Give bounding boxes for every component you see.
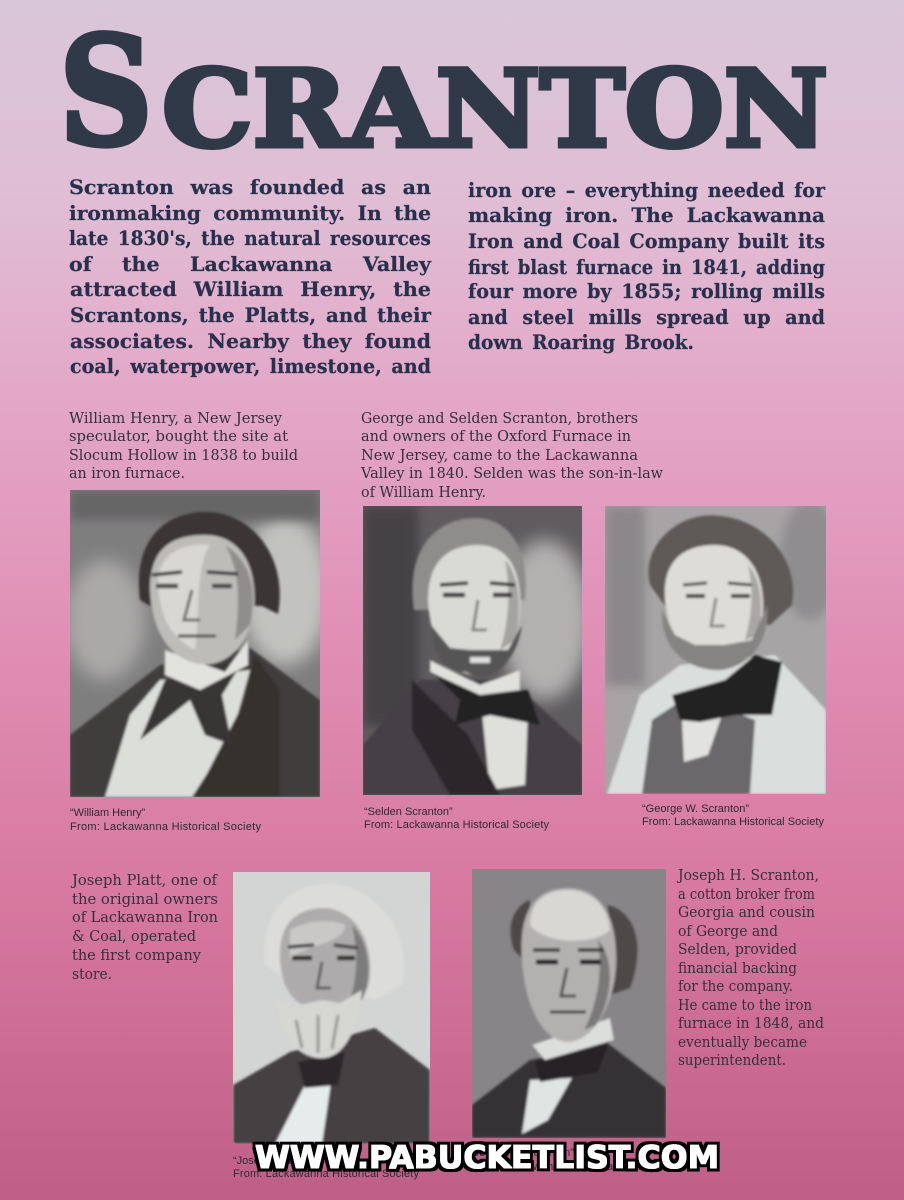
intro text: left column [69,176,432,378]
text: Joseph Platt description: the first company [72,948,202,964]
text: Joseph Platt description: the original owners [72,892,218,908]
text: William Henry description: speculator, bought the site at [69,429,288,445]
intro text: left column: of the Lackawanna Valley [69,253,432,276]
intro text: right column [468,179,826,354]
text: George and Selden description: of William Henry. [361,485,486,501]
caption: William Henry [70,807,262,833]
caption: Joseph H. Scranton [470,1147,656,1173]
text: Joseph Platt description: store. [72,967,112,983]
text: George and Selden description: George and Selden Scranton, brothers [361,411,638,427]
intro text: left column: ironmaking community. In the [69,202,431,225]
text: George and Selden description [360,411,664,501]
caption: Joseph H. Scranton: From: Lackawanna Historical Society [470,1161,656,1173]
intro text: right column: iron ore – everything needed for [468,179,826,202]
intro text: left column: coal, waterpower, limestone, and [70,355,431,378]
portrait: Joseph Platt [233,872,430,1144]
text: Joseph H. Scranton description: He came to the iron [678,998,812,1014]
text: George and Selden description: New Jersey, came to the Lackawanna [361,448,638,464]
intro text: right column: down Roaring Brook. [468,331,694,354]
caption: Selden Scranton: “Selden Scranton” [364,806,453,818]
text: Joseph H. Scranton description: Joseph H. Scranton, [676,868,819,884]
text: Joseph Platt description: of Lackawanna Iron [72,910,218,926]
text: Joseph Platt description [70,873,219,983]
portrait: Joseph H. Scranton [472,869,666,1138]
text: Joseph H. Scranton description: of George and [678,924,778,940]
text: Joseph H. Scranton description: Selden, provided [678,942,797,958]
caption: Selden Scranton [364,806,550,831]
text: Joseph Platt description: Joseph Platt, one of [70,873,219,889]
intro text: left column: Scrantons, the Platts, and their [70,304,432,327]
text: William Henry description: Slocum Hollow in 1838 to build [69,448,298,464]
caption: George W. Scranton: “George W. Scranton” [642,803,749,815]
intro text: left column: late 1830's, the natural resources [69,227,431,250]
title: S [59,4,153,180]
portrait: William Henry [65,490,330,797]
caption: Joseph Platt: From: Lackawanna Historical Society [233,1168,420,1180]
caption: Joseph H. Scranton: “Joseph H. Scranton” [470,1147,574,1159]
text: William Henry description: an iron furnace. [69,466,185,482]
text: Joseph H. Scranton description: eventually became [678,1035,807,1051]
intro text: left column: attracted William Henry, the [70,278,431,301]
title: CRANTON [162,46,828,171]
text: Joseph H. Scranton description: Georgia and cousin [678,905,815,921]
intro text: right column: and steel mills spread up and [468,306,825,329]
title [59,4,828,180]
text: Joseph H. Scranton description: financial backing [678,961,797,977]
caption: Selden Scranton: From: Lackawanna Historical Society [364,819,550,831]
intro text: left column: associates. Nearby they found [70,330,431,353]
portrait: George W. Scranton [605,500,840,794]
text: George and Selden description: Valley in 1840. Selden was the son-in-law [360,466,664,482]
caption: William Henry: “William Henry” [70,807,146,819]
caption: George W. Scranton: From: Lackawanna Historical Society [642,816,824,828]
text: George and Selden description: and owners of the Oxford Furnace in [361,429,631,445]
portrait: Selden Scranton [363,506,590,795]
caption: Joseph Platt: “Joseph Platt” [233,1155,301,1167]
caption: George W. Scranton [642,803,824,828]
text: Joseph Platt description: & Coal, operated [72,929,196,945]
caption: William Henry: From: Lackawanna Historical Society [70,821,262,833]
intro text: right column: making iron. The Lackawanna [468,204,825,227]
text: William Henry description [69,411,298,482]
intro text: right column: four more by 1855; rolling mills [468,280,825,303]
text: William Henry description: William Henry, a New Jersey [69,411,283,427]
text: Joseph H. Scranton description: superintendent. [678,1053,786,1069]
watermark: WWW.PABUCKETLIST.COM [255,1140,719,1176]
text: Joseph H. Scranton description: for the company. [678,979,793,995]
text: Joseph H. Scranton description: a cotton broker from [678,887,815,903]
intro text: right column: Iron and Coal Company built its [468,230,825,253]
text: Joseph H. Scranton description: furnace in 1848, and [678,1016,824,1032]
text: Joseph H. Scranton description [676,868,824,1069]
caption: Joseph Platt [233,1155,420,1180]
intro text: right column: first blast furnace in 1841, adding [468,256,825,279]
intro text: left column: Scranton was founded as an [69,176,431,199]
